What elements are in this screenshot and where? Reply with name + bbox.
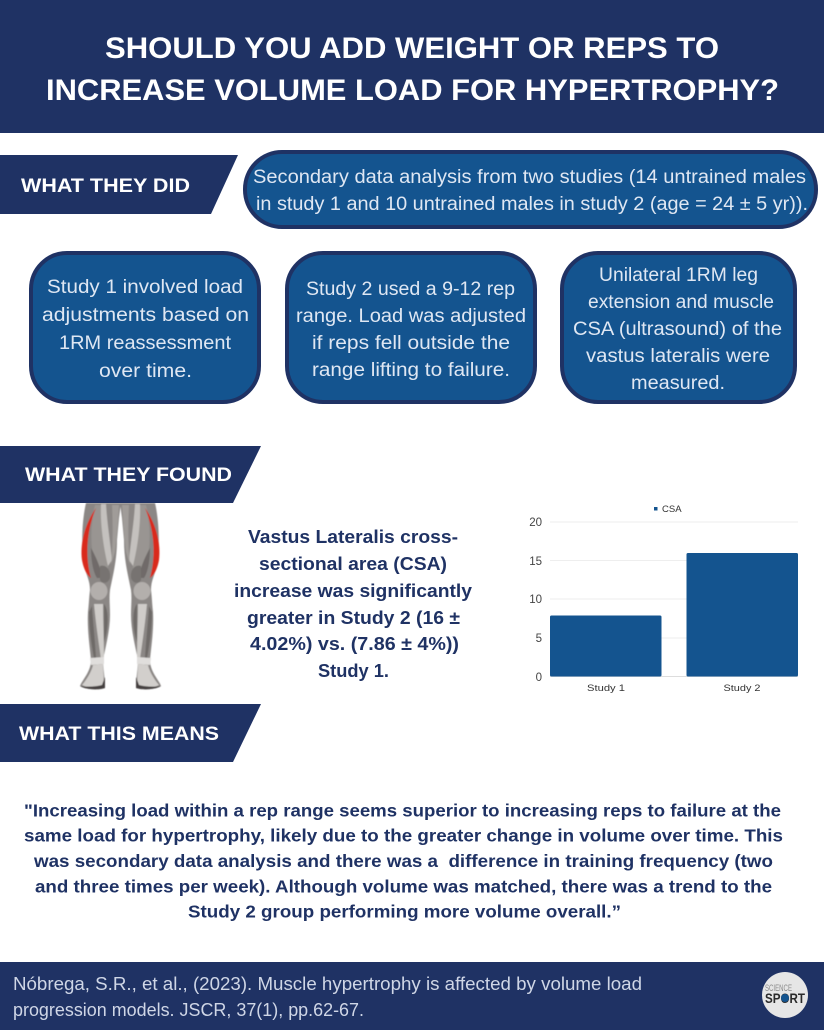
panel: study 2 method: range lifting to failure. <box>312 360 510 381</box>
icon: leg muscle anatomy <box>80 503 161 689</box>
text block: conclusion quote: was secondary data analysis and there was a difference in training frequency (two <box>33 851 773 871</box>
text block: key finding: greater in Study 2 (16 ± <box>247 607 460 628</box>
icon: Science for Sport logo <box>762 972 808 1018</box>
x axis labels: Study 1 <box>587 683 625 694</box>
title banner: INCREASE VOLUME LOAD FOR HYPERTROPHY? <box>46 74 779 107</box>
panel: measurements: CSA (ultrasound) of the <box>573 319 782 340</box>
panel: study 2 method <box>287 253 535 402</box>
text block: key finding: Study 1. <box>318 660 389 681</box>
icon: Science for Sport logo: SPORT <box>765 990 805 1006</box>
panel: study summary <box>245 152 816 227</box>
y axis labels: 10 <box>529 594 542 606</box>
panel: measurements: extension and muscle <box>588 292 774 313</box>
panel: study 1 method: over time. <box>99 361 192 382</box>
section heading: what they did <box>0 155 238 214</box>
text block: conclusion quote: and three times per week). Although volume was matched, there was a trend to the <box>35 876 772 896</box>
bar: Study 1 <box>550 616 662 676</box>
panel: study 2 method: if reps fell outside the <box>312 333 510 354</box>
bar: Study 2 <box>686 553 798 676</box>
text block: key finding <box>234 526 473 681</box>
text block: conclusion quote: same load for hypertrophy, likely due to the greater change in volume over time. This <box>24 826 783 846</box>
y axis labels: 0 <box>536 672 542 684</box>
y axis labels: 20 <box>529 517 542 529</box>
legend: CSA <box>654 504 682 515</box>
section heading: what they did: WHAT THEY DID <box>21 176 190 197</box>
panel: measurements <box>562 253 795 402</box>
y axis labels <box>529 517 542 684</box>
panel: study 1 method: 1RM reassessment <box>59 333 232 354</box>
title banner: SHOULD YOU ADD WEIGHT OR REPS TO <box>105 32 719 65</box>
section heading: what this means <box>0 704 261 762</box>
y axis labels: 15 <box>529 556 542 568</box>
panel: study summary: in study 1 and 10 untrained males in study 2 (age = 24 ± 5 yr)). <box>256 194 808 215</box>
text block: key finding: increase was significantly <box>234 580 473 601</box>
text block: key finding: Vastus Lateralis cross- <box>248 526 458 547</box>
panel: measurements: measured. <box>631 373 725 394</box>
panel: measurements: vastus lateralis were <box>586 346 770 367</box>
text block: conclusion quote <box>24 800 783 922</box>
section heading: what they found: WHAT THEY FOUND <box>25 465 232 486</box>
x axis labels: Study 2 <box>724 683 760 694</box>
text block: conclusion quote: "Increasing load within a rep range seems superior to increasing reps to failure at the <box>24 800 781 820</box>
bar chart: CSA by study <box>529 504 798 694</box>
panel: study 1 method <box>31 253 259 402</box>
legend: CSA: CSA <box>662 504 682 515</box>
x axis labels <box>587 683 760 694</box>
panel: study 1 method: adjustments based on <box>42 305 249 326</box>
text block: conclusion quote: Study 2 group performing more volume overall.” <box>188 902 621 922</box>
footer: citation <box>0 962 824 1030</box>
panel: measurements: Unilateral 1RM leg <box>599 265 758 286</box>
footer: citation: Nóbrega, S.R., et al., (2023). Muscle hypertrophy is affected by volume load <box>13 974 642 994</box>
panel: study 2 method: range. Load was adjusted <box>296 306 526 327</box>
panel: study 2 method: Study 2 used a 9-12 rep <box>306 279 515 300</box>
title banner <box>0 0 824 133</box>
text block: key finding: sectional area (CSA) <box>259 553 447 574</box>
y axis labels: 5 <box>536 633 542 645</box>
section heading: what this means: WHAT THIS MEANS <box>19 724 219 745</box>
icon: Science for Sport logo: SCIENCE <box>765 983 792 993</box>
panel: study summary: Secondary data analysis from two studies (14 untrained males <box>253 167 806 188</box>
panel: study 1 method: Study 1 involved load <box>47 277 243 298</box>
footer: citation: progression models. JSCR, 37(1), pp.62-67. <box>13 1000 364 1020</box>
text block: key finding: 4.02%) vs. (7.86 ± 4%)) <box>250 633 459 654</box>
section heading: what they found <box>0 446 261 503</box>
